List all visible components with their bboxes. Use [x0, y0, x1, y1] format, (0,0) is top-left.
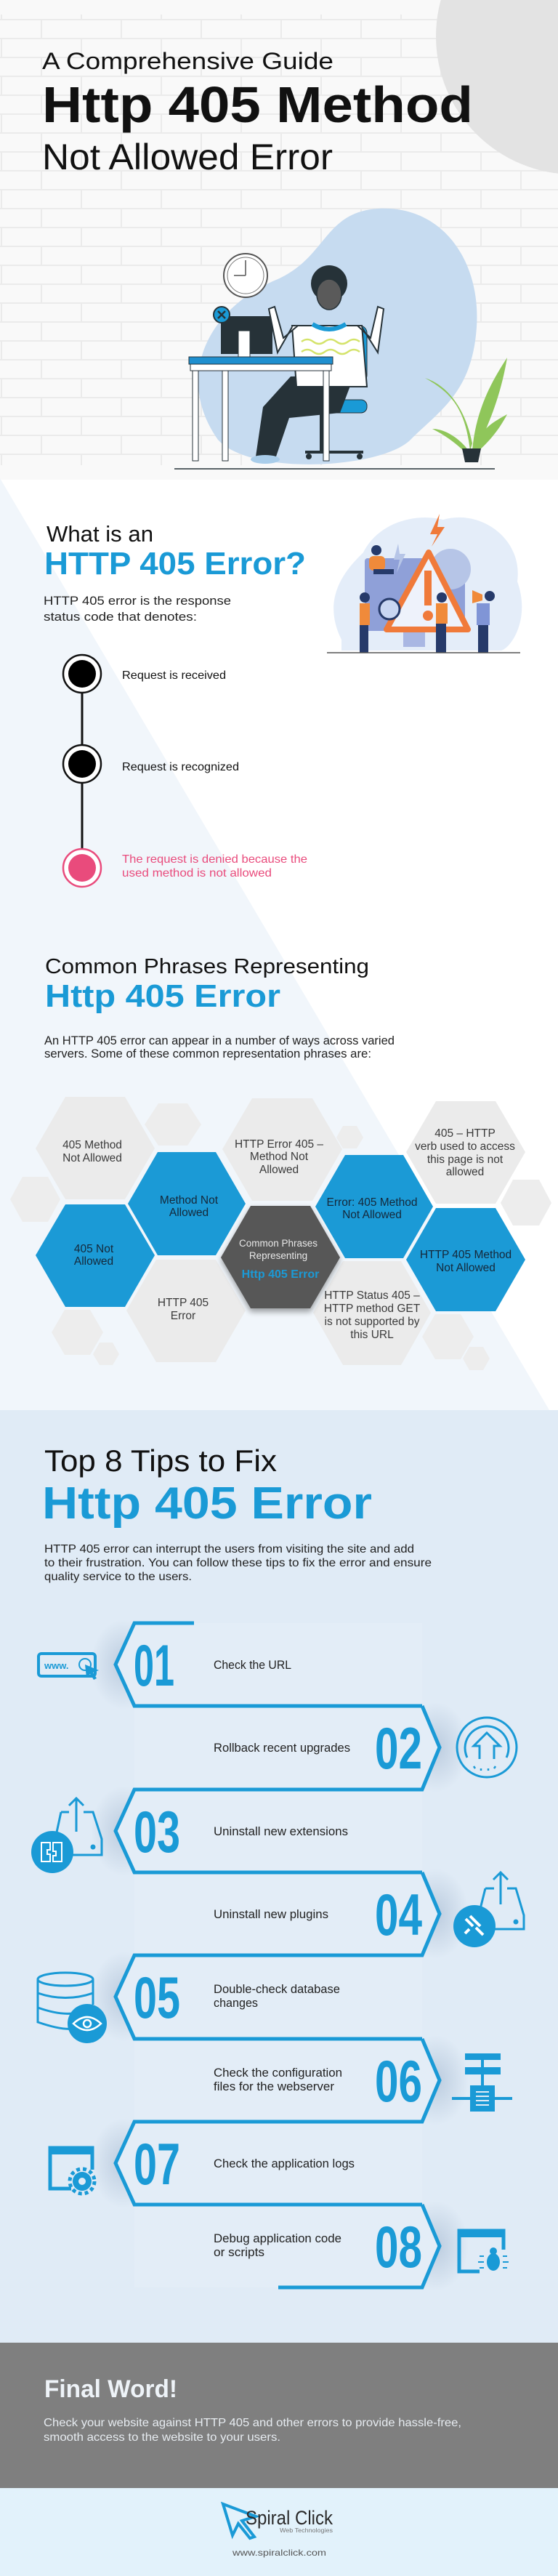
logo: Spiral Click: [246, 2507, 333, 2529]
hex: HTTP Status 405: HTTP method GET: [324, 1303, 421, 1315]
desk: [189, 357, 333, 364]
hex: 405 - HTTP verb used: [406, 1101, 525, 1204]
tips section background: [0, 1410, 558, 2343]
step 1: [63, 655, 226, 693]
tip 05: 05: [134, 1965, 180, 2031]
hex: Error: 405 Method Not Allowed (blue): Error: 405 Method: [327, 1196, 417, 1209]
tip 03: 03: [134, 1800, 180, 1865]
head: [311, 265, 347, 302]
tip 04: Uninstall new plugins: [214, 1908, 328, 1921]
tip 07: Check the application logs: [214, 2157, 355, 2170]
hex: HTTP 405 Method Not Allowed (blue): HTTP 405 Method: [420, 1249, 512, 1261]
hex: 405 - HTTP verb used: 405 – HTTP: [434, 1127, 496, 1140]
hex: 405 Method Not Allowed: 405 Method: [62, 1139, 122, 1151]
tip 08: [214, 2215, 509, 2280]
section background: diagonal light area: [0, 478, 558, 1410]
hex: 405 Not Allowed (blue): Allowed: [74, 1255, 113, 1268]
tip 02: 02: [375, 1716, 422, 1782]
hex: HTTP Status 405: [313, 1261, 431, 1365]
legs: [256, 374, 355, 456]
hex: HTTP Error 405 - Method Not Allowed: Allowed: [259, 1164, 299, 1176]
icon: database eye: [38, 1973, 107, 2043]
intro text: [44, 594, 231, 624]
final word panel: Check your website against HTTP 405 and other errors to provide hassle-free,: [44, 2417, 461, 2429]
step 2: [63, 745, 239, 783]
heading: top 8 tips: [42, 1444, 372, 1529]
tip 07: 07: [134, 2132, 180, 2197]
tip 06: 06: [375, 2049, 422, 2114]
hex: 405 Method Not Allowed: Not Allowed: [62, 1152, 122, 1164]
phrases intro text: servers. Some of these common representation phrases are:: [44, 1047, 371, 1060]
tips intro text: to their frustration. You can follow these tips to fix the error and ensure: [44, 1557, 432, 1569]
torso: [292, 326, 367, 387]
tips intro text: HTTP 405 error can interrupt the users from visiting the site and add: [44, 1543, 414, 1555]
icon: upgrade circle: [457, 1718, 517, 1777]
tip 03: Uninstall new extensions: [214, 1825, 348, 1838]
hex: center dark: Representing: [249, 1250, 307, 1261]
hex: Method Not Allowed (blue): Method Not: [160, 1194, 219, 1207]
tip 04: [214, 1872, 524, 1948]
plant: [425, 378, 472, 451]
hex: center dark: Common Phrases: [239, 1238, 318, 1249]
final word panel: Final Word!: [44, 2375, 177, 2403]
footer: [0, 2488, 558, 2576]
phrases intro text: An HTTP 405 error can appear in a number of ways across varied: [44, 1034, 395, 1047]
logo: [223, 2504, 333, 2538]
icon: window gear: [49, 2146, 94, 2194]
hex: Method Not Allowed (blue): Allowed: [169, 1207, 209, 1219]
hex: HTTP Status 405: this URL: [350, 1329, 394, 1341]
hex: Error: 405 Method Not Allowed (blue): Not Allowed: [342, 1209, 402, 1221]
hex: Method Not Allowed (blue): [128, 1152, 246, 1255]
tip 01: 01: [134, 1633, 174, 1699]
tip 05: [38, 1965, 340, 2043]
hero title: [42, 48, 473, 177]
tip 04: 04: [375, 1883, 422, 1948]
heading: what is an HTTP 405 error: [44, 521, 306, 581]
phrases intro text: [44, 1034, 395, 1060]
hex: 405 - HTTP verb used: this page is not: [427, 1154, 504, 1166]
step 1: Request is received: [122, 669, 226, 682]
tip 06: [214, 2049, 512, 2114]
final word panel: smooth access to the website to your users.: [44, 2431, 280, 2444]
hex: center dark: Http 405 Error: [242, 1268, 319, 1281]
monitor: [221, 316, 272, 354]
tip 07: [49, 2132, 355, 2197]
chair: [347, 326, 367, 382]
illustration: warning sign with people: [327, 514, 522, 653]
tip 02: Rollback recent upgrades: [214, 1742, 350, 1755]
clock: [224, 254, 267, 297]
step 3: The request is denied because the: [122, 853, 307, 866]
heading: top 8 tips: Http 405 Error: [42, 1478, 372, 1529]
icon: www: [39, 1654, 99, 1680]
final word panel: [0, 2343, 558, 2488]
hex: 405 Not Allowed (blue): [36, 1204, 155, 1307]
hero title: Not Allowed Error: [42, 137, 333, 177]
tip 03: [31, 1798, 348, 1873]
tip 06: Check the configuration: [214, 2066, 342, 2080]
hex: HTTP Error 405 - Method Not Allowed: HTTP Error 405 –: [235, 1138, 323, 1151]
hex: 405 - HTTP verb used: verb used to access: [415, 1140, 515, 1153]
tips intro text: quality service to the users.: [44, 1571, 192, 1583]
intro text: status code that denotes:: [44, 610, 197, 624]
hex: HTTP 405 Error: Error: [171, 1310, 195, 1322]
hex: HTTP Status 405: is not supported by: [325, 1316, 420, 1328]
tip 08: or scripts: [214, 2246, 264, 2259]
hex: HTTP Status 405: HTTP Status 405 –: [324, 1289, 420, 1302]
tip 05: Double-check database: [214, 1983, 340, 1996]
tips intro text: [44, 1543, 432, 1583]
hex: HTTP Error 405 - Method Not Allowed: Method Not: [250, 1151, 309, 1163]
step 2: Request is recognized: [122, 761, 239, 773]
timeline: [63, 655, 307, 887]
tip 02: [214, 1716, 517, 1782]
hexagon grid: [10, 1097, 551, 1370]
website url: www.spiralclick.com: [232, 2548, 326, 2558]
tip 06: files for the webserver: [214, 2080, 335, 2093]
tip 01: [39, 1633, 291, 1699]
tips ribbon: [91, 1619, 469, 2291]
icon: extensions tray: [31, 1798, 102, 1873]
heading: common phrases: Http 405 Error: [45, 978, 280, 1014]
icon: server config: [452, 2053, 512, 2112]
icon: plugins tray: [453, 1872, 524, 1947]
heading: common phrases: [45, 955, 369, 1014]
step 3: [63, 849, 307, 887]
hex: HTTP 405 Method Not Allowed (blue): [406, 1208, 525, 1311]
hex: HTTP 405 Method Not Allowed (blue): Not Allowed: [436, 1262, 496, 1274]
tip 08: Debug application code: [214, 2232, 341, 2245]
heading: top 8 tips: Top 8 Tips to Fix: [44, 1444, 277, 1478]
hex: HTTP 405 Error: HTTP 405: [158, 1297, 209, 1309]
icon: window bug: [458, 2229, 509, 2271]
tip 05: changes: [214, 1997, 258, 2010]
hex: Error: 405 Method Not Allowed (blue): [315, 1155, 433, 1258]
heading: what is an HTTP 405 error: What is an: [46, 521, 153, 547]
hero background: [0, 0, 558, 480]
tip 08: 08: [375, 2215, 422, 2280]
logo: Web Technologies: [280, 2527, 333, 2534]
tip 01: Check the URL: [214, 1659, 291, 1672]
heading: what is an HTTP 405 error: HTTP 405 Error?: [44, 546, 306, 581]
hex: center dark: [221, 1206, 340, 1312]
hex: HTTP Error 405 - Method Not Allowed: [222, 1098, 342, 1201]
intro text: HTTP 405 error is the response: [44, 594, 231, 608]
hex: 405 Not Allowed (blue): 405 Not: [74, 1243, 114, 1255]
hero illustration: person at desk: [174, 209, 507, 469]
step 3: used method is not allowed: [122, 867, 272, 880]
hex: 405 Method Not Allowed: [36, 1097, 155, 1199]
hero title: Http 405 Method: [42, 76, 473, 133]
heading: common phrases: Common Phrases Representing: [45, 955, 369, 978]
hero title: A Comprehensive Guide: [42, 48, 333, 74]
hex: HTTP 405 Error: [126, 1260, 246, 1362]
hex: 405 - HTTP verb used: allowed: [446, 1166, 484, 1178]
icon: www: www.: [44, 1660, 68, 1671]
